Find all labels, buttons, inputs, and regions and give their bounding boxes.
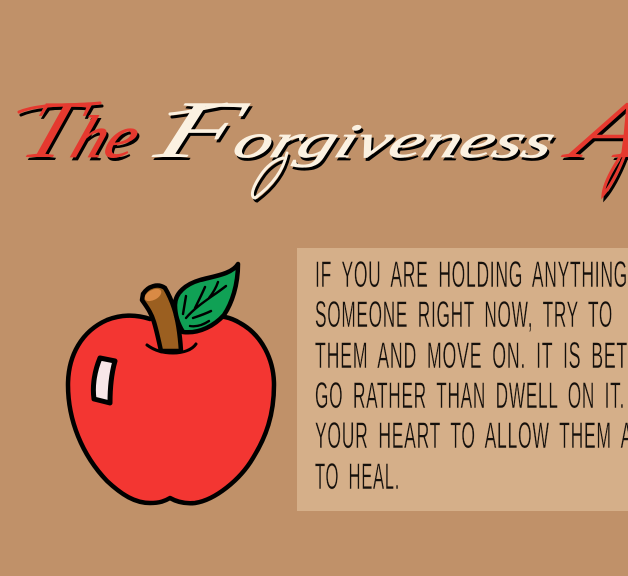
apple body: [68, 314, 274, 503]
title: The: [11, 85, 156, 175]
title: The: [13, 88, 158, 178]
text block: [315, 254, 628, 497]
apple dimple: [147, 344, 196, 353]
highlight: [93, 358, 115, 403]
leaf: [175, 264, 238, 332]
title: Forgiveness: [146, 88, 576, 178]
stem: [142, 286, 181, 351]
stem cap: [143, 286, 163, 304]
icon: apple: [68, 264, 274, 503]
title: Forgiveness: [144, 85, 574, 175]
text block: TO HEAL.: [315, 456, 400, 497]
panel: forgiveness message: [297, 248, 628, 511]
title: [11, 85, 628, 201]
